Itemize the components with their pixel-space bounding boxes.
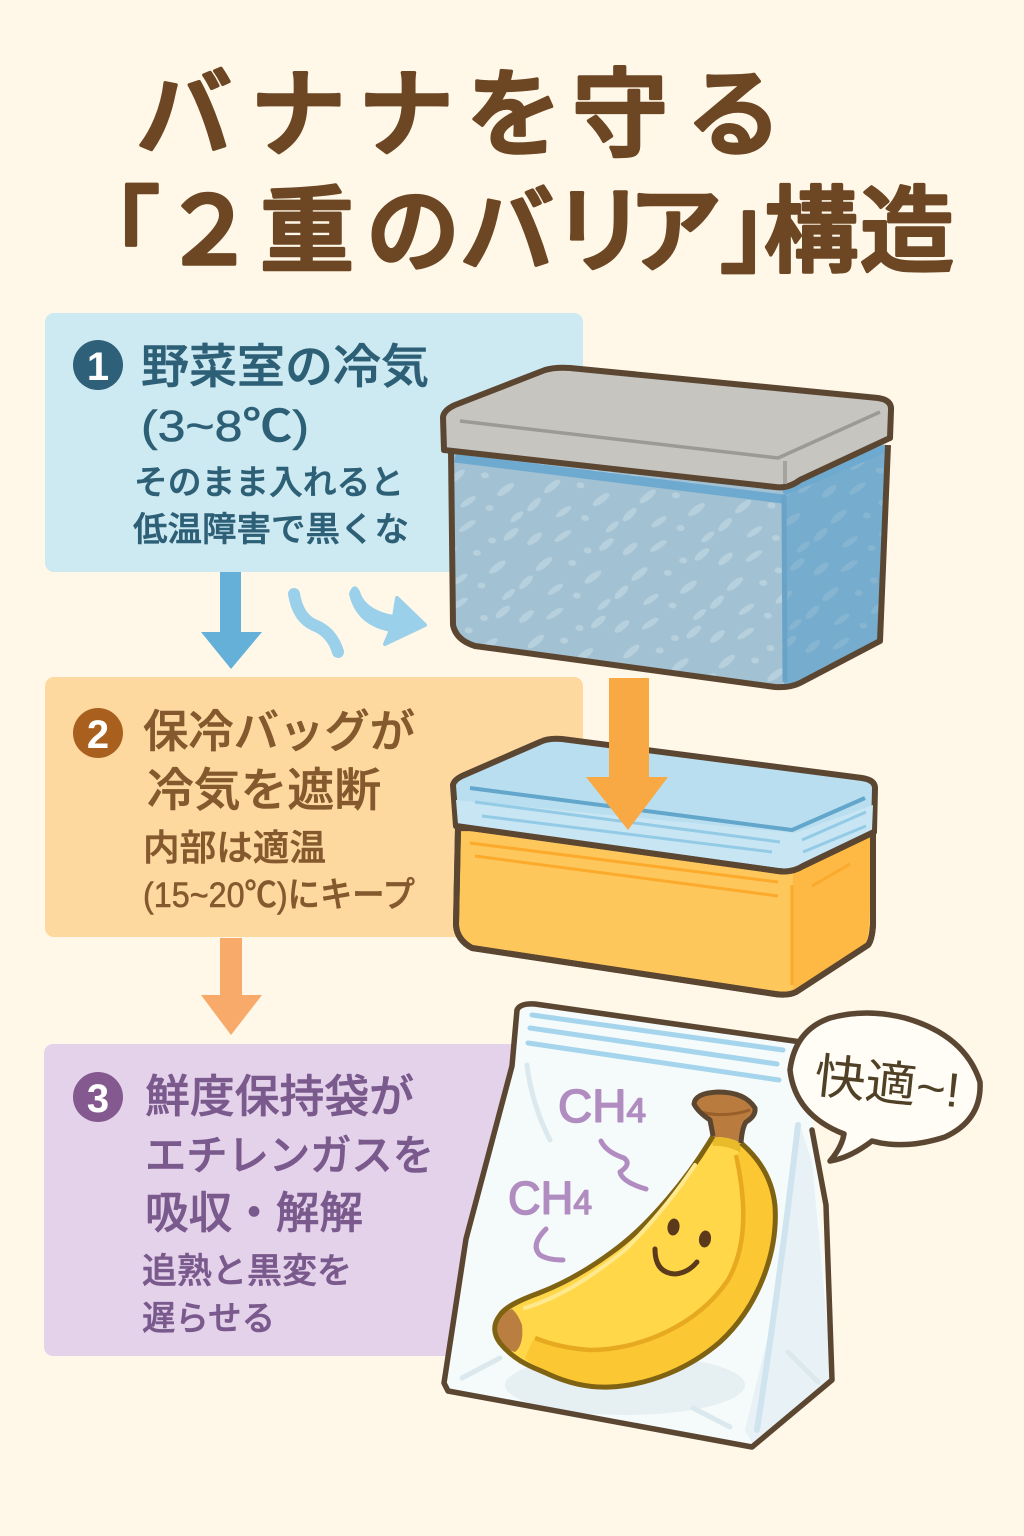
speech bubble: 快適~! <box>812 1050 963 1118</box>
panel: step 2 cool bag: (15~20℃)にキープ <box>143 876 415 915</box>
panel: step 1 cold air: 低温障害で黒くな <box>133 511 409 549</box>
arrow: cold air curved <box>351 588 425 644</box>
panel: step 1 cold air <box>45 313 583 572</box>
title <box>66 37 954 292</box>
gas label: CH4 lower <box>508 1172 592 1260</box>
panel: step 1 cold air: (3~8℃) <box>141 402 309 451</box>
gas label: CH4 top <box>558 1080 646 1189</box>
panel: step 3 freshness bag: 追熟と黒変を <box>142 1252 352 1291</box>
vegetable box <box>443 368 891 687</box>
banana face <box>655 1218 712 1274</box>
panel: step 3 freshness bag: エチレンガスを <box>145 1132 434 1179</box>
panel: step 2 cool bag: 2 <box>87 713 109 757</box>
speech bubble <box>790 1013 980 1161</box>
zipper lines <box>528 1015 783 1080</box>
gas label: CH4 top: CH4 <box>558 1080 646 1132</box>
panel: step 2 cool bag: 冷気を遮断 <box>147 764 381 816</box>
panel: step 2 cool bag <box>45 677 583 937</box>
panel: step 1 cold air: 1 <box>87 345 109 389</box>
panel: step 3 freshness bag <box>44 1044 544 1356</box>
banana character <box>495 1092 775 1387</box>
arrow: orange down <box>201 938 262 1035</box>
panel: step 3 freshness bag: 吸収・解解 <box>145 1189 363 1238</box>
arrow: orange into bag <box>586 678 668 830</box>
panel: step 2 cool bag: 内部は適温 <box>143 827 326 868</box>
panel: step 1 cold air: 野菜室の冷気 <box>141 340 429 393</box>
panel: step 1 cold air: そのまま入れると <box>134 464 404 502</box>
arrow: cold air wave <box>294 594 338 652</box>
cool bag <box>453 739 875 995</box>
arrow: blue down <box>201 572 262 669</box>
title: 「２重のバリア」構造 <box>66 156 954 292</box>
panel: step 3 freshness bag: 鮮度保持袋が <box>145 1071 414 1122</box>
panel: step 3 freshness bag: 3 <box>87 1077 109 1121</box>
gas label: CH4 lower: CH4 <box>508 1172 592 1224</box>
title: バナナを守る <box>136 37 782 176</box>
panel: step 2 cool bag: 保冷バッグが <box>143 706 415 757</box>
freshness bag <box>444 1004 834 1447</box>
panel: step 3 freshness bag: 遅らせる <box>142 1300 275 1338</box>
